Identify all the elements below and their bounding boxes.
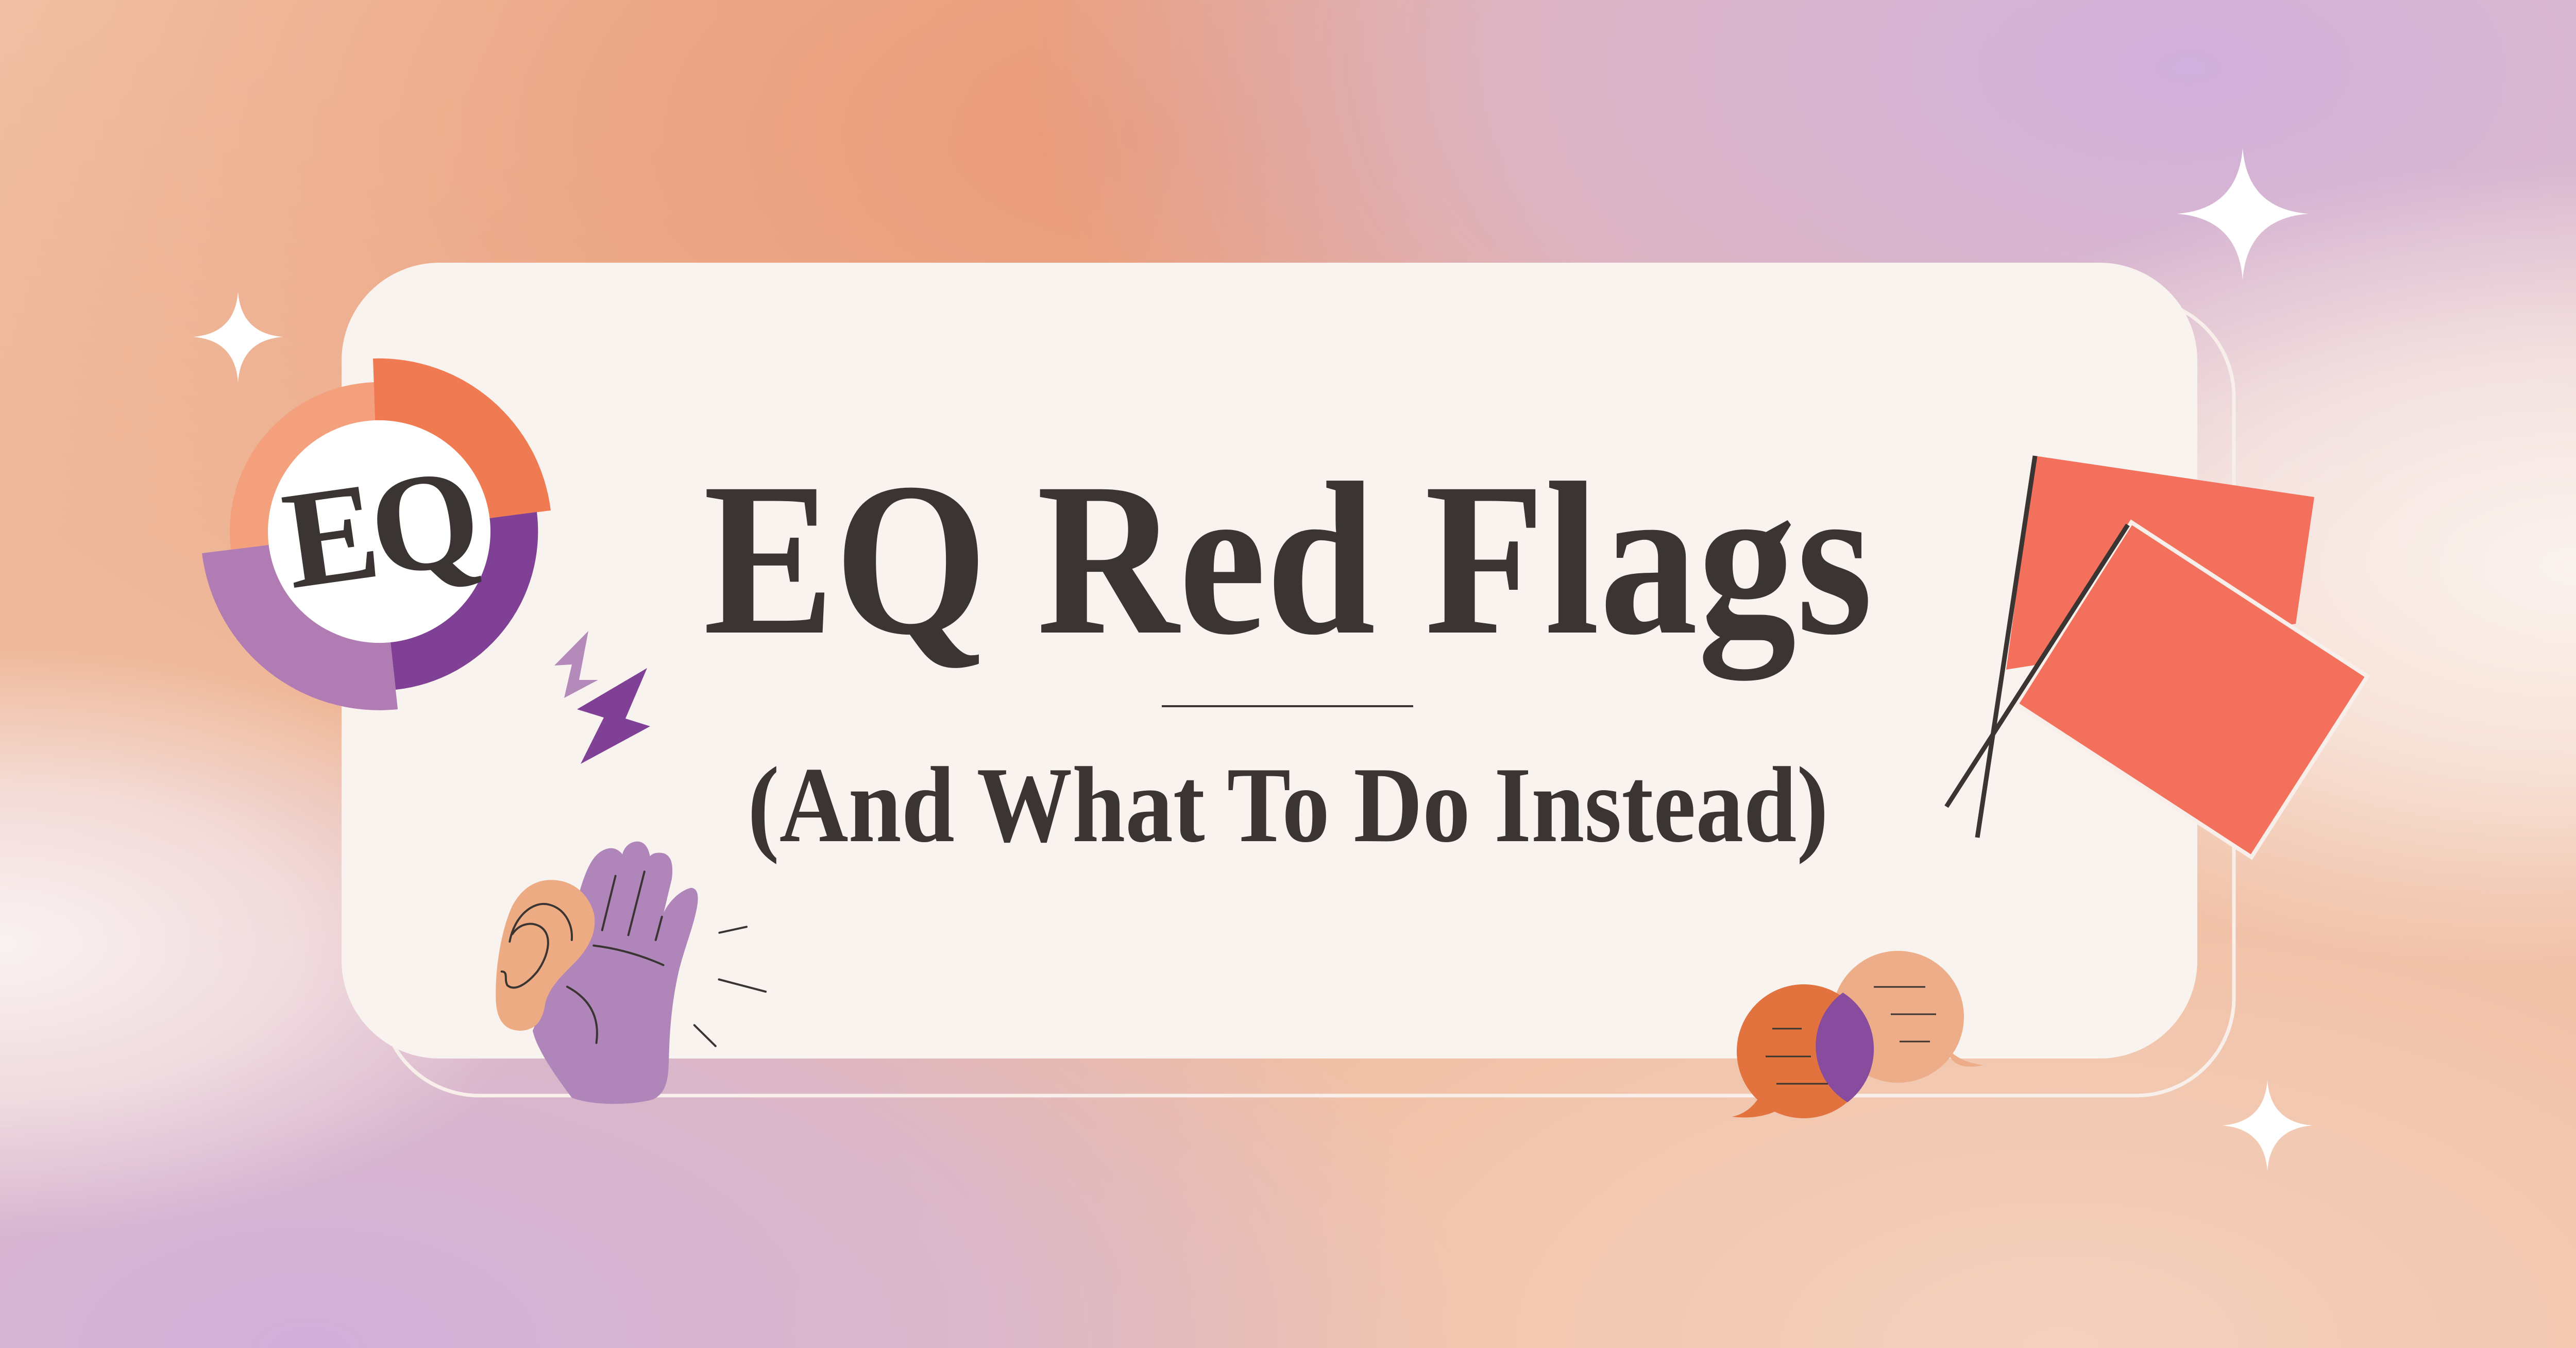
icon: EQ ring logo: EQ: [275, 439, 483, 618]
subtitle: (And What To Do Instead): [748, 745, 1828, 865]
title: EQ Red Flags: [703, 437, 1873, 684]
icon: EQ ring logo: [202, 359, 551, 710]
divider: [1162, 705, 1413, 707]
sparkle bottom-right: [2222, 1080, 2313, 1171]
icon: lightning bolts: [554, 631, 650, 764]
icon: red flags: [1946, 456, 2367, 857]
ear: [496, 880, 595, 1031]
hand: [533, 842, 698, 1104]
icon: ear and hand: [496, 842, 766, 1104]
sparkle top-left: [193, 292, 283, 382]
outline frame: [381, 299, 2234, 1096]
main card: [342, 263, 2197, 1059]
sparkle top-right: [2177, 148, 2309, 280]
icon: speech bubbles: [1732, 951, 1984, 1118]
